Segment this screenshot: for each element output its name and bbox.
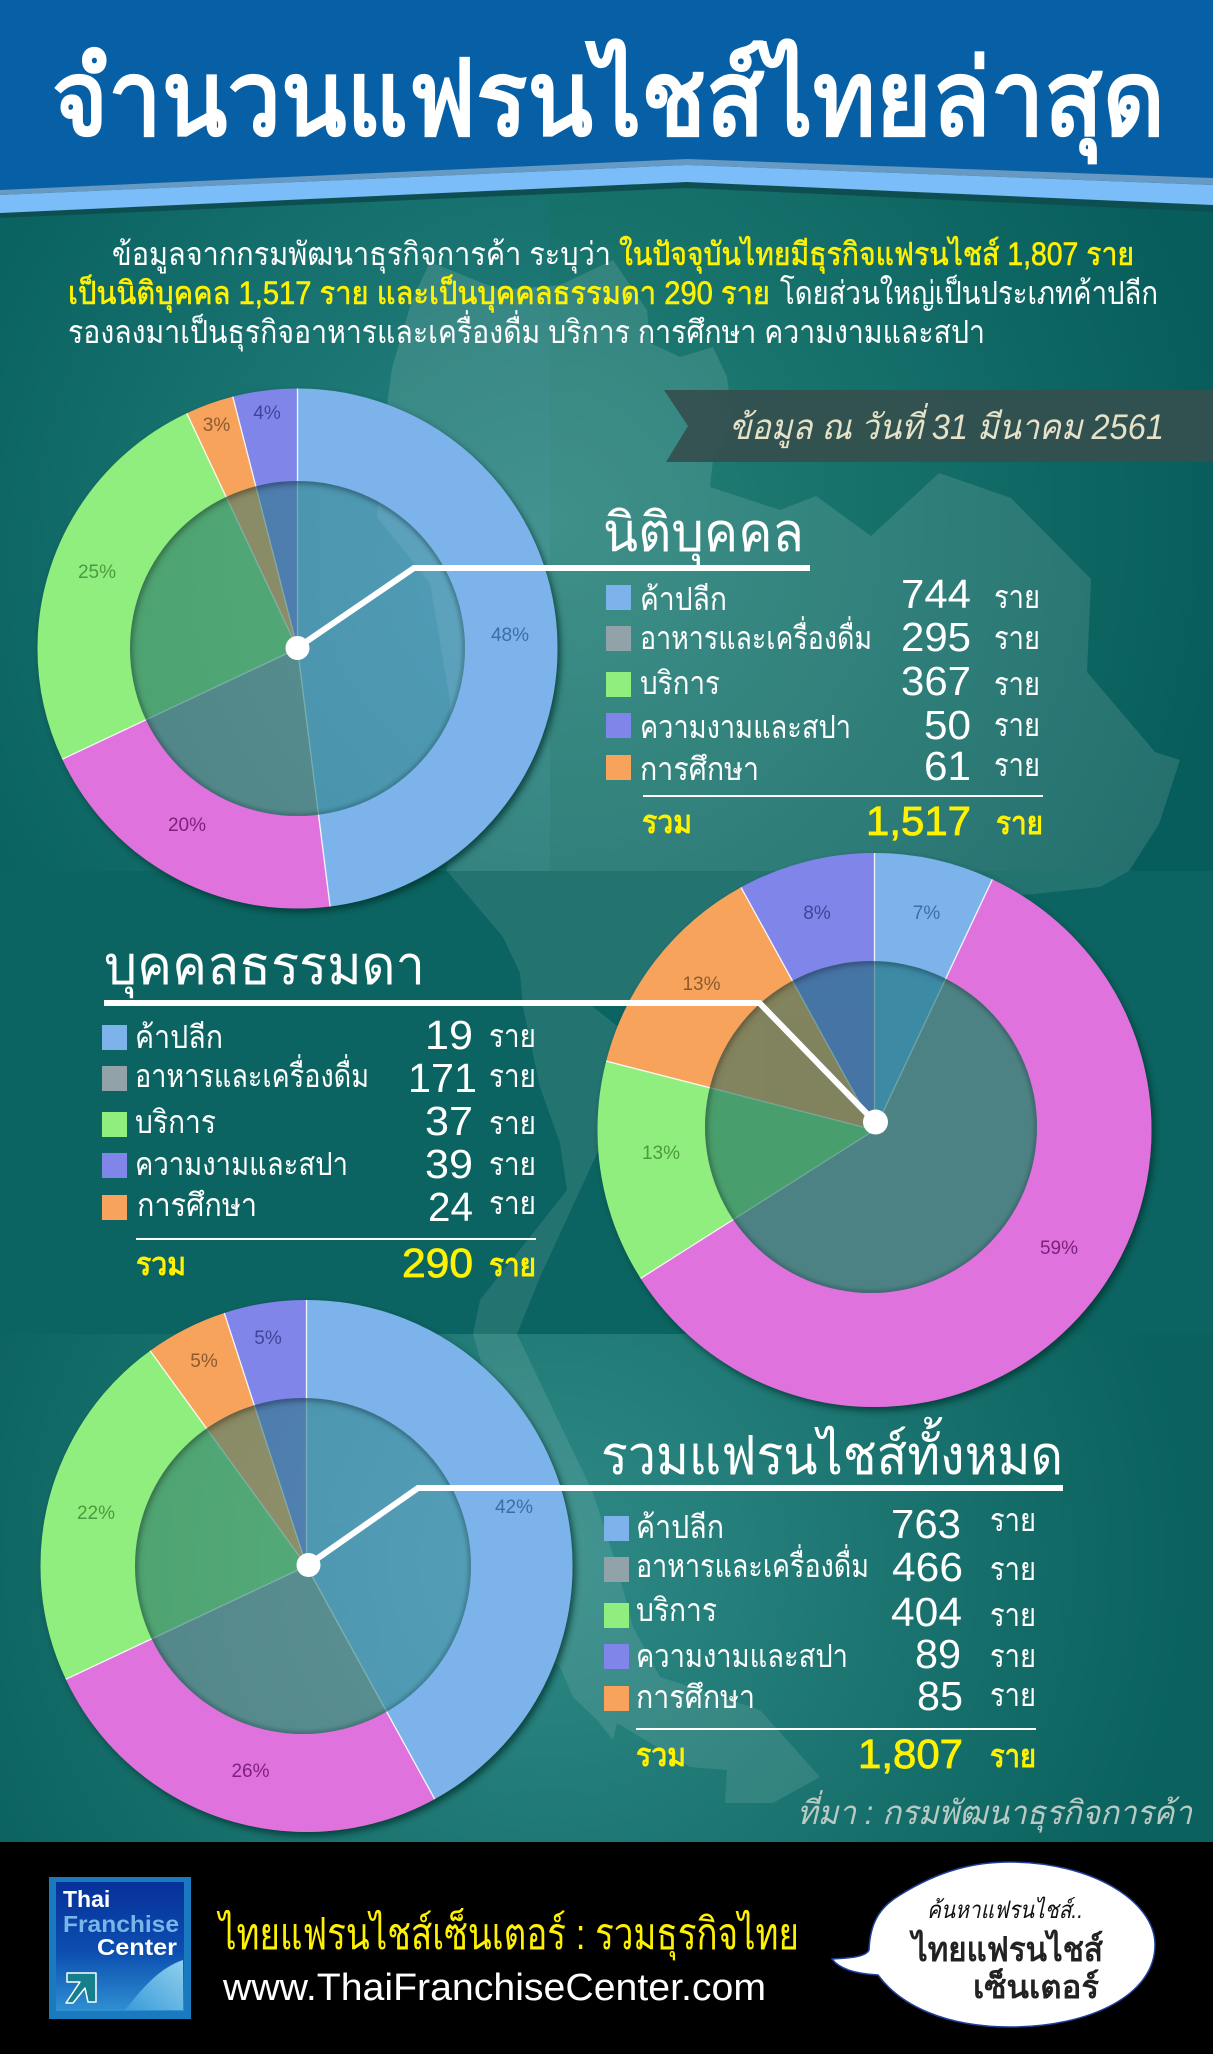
footer tagline: ไทยแฟรนไชส์เซ็นเตอร์ : รวมธุรกิจไทย xyxy=(217,1908,799,1961)
legend table: บุคคลธรรมดา: 19 xyxy=(425,1012,473,1058)
legend table: นิติบุคคล: 367 xyxy=(901,658,971,704)
legend table: รวมแฟรนไชส์ทั้งหมด: 89 xyxy=(915,1631,961,1677)
logo: Thai Franchise Center: Center xyxy=(97,1934,177,1960)
logo: Thai Franchise Center: Franchise xyxy=(63,1911,179,1937)
percentage labels xyxy=(78,403,529,836)
legend table: นิติบุคคล: 295 xyxy=(901,614,971,660)
legend table: บุคคลธรรมดา: บริการ xyxy=(135,1104,216,1140)
heading: บุคคลธรรมดา: บุคคลธรรมดา xyxy=(104,936,425,999)
legend table: รวมแฟรนไชส์ทั้งหมด: 85 xyxy=(917,1673,963,1719)
legend table: นิติบุคคล: 744 xyxy=(901,571,971,617)
legend table: นิติบุคคล: อาหารและเครื่องดื่ม xyxy=(640,616,872,656)
legend table: นิติบุคคล: บริการ xyxy=(640,665,720,701)
speech bubble xyxy=(832,1862,1155,2027)
legend table: บุคคลธรรมดา xyxy=(102,1012,536,1286)
legend table: รวมแฟรนไชส์ทั้งหมด: ราย xyxy=(990,1738,1036,1774)
legend table: รวมแฟรนไชส์ทั้งหมด: 404 xyxy=(891,1589,962,1635)
legend table: นิติบุคคล: รวม xyxy=(642,804,692,840)
footer website: www.ThaiFranchiseCenter.com xyxy=(222,1967,766,2009)
legend table: รวมแฟรนไชส์ทั้งหมด: ค้าปลีก xyxy=(636,1509,724,1545)
legend table: นิติบุคคล: ราย xyxy=(994,666,1040,702)
speech bubble: ไทยแฟรนไชส์ xyxy=(909,1929,1103,1969)
leader line with pin xyxy=(104,1003,888,1134)
legend table: บุคคลธรรมดา: ราย xyxy=(489,1247,536,1283)
percentage labels: 3% xyxy=(203,415,230,436)
legend table: นิติบุคคล: ความงามและสปา xyxy=(640,709,851,745)
donut chart: นิติบุคคล xyxy=(62,388,529,906)
legend table: บุคคลธรรมดา: ความงามและสปา xyxy=(135,1146,348,1182)
legend table: นิติบุคคล: 1,517 xyxy=(866,798,971,844)
source note: ที่มา : กรมพัฒนาธุรกิจการค้า xyxy=(797,1790,1193,1833)
legend table: รวมแฟรนไชส์ทั้งหมด: ความงามและสปา xyxy=(636,1638,848,1674)
intro text block: ในปัจจุบันไทยมีธุรกิจแฟรนไชส์ 1,807 ราย xyxy=(619,236,1134,274)
legend table: บุคคลธรรมดา: ราย xyxy=(489,1105,536,1141)
footer panel xyxy=(0,1842,1213,2054)
percentage labels: 8% xyxy=(803,903,831,924)
percentage labels xyxy=(77,1328,533,1782)
percentage labels: 48% xyxy=(491,625,529,646)
percentage labels: 5% xyxy=(190,1351,218,1372)
legend table: รวมแฟรนไชส์ทั้งหมด: ราย xyxy=(990,1677,1036,1713)
percentage labels xyxy=(642,903,1078,1259)
percentage labels: 4% xyxy=(253,403,281,424)
legend table: บุคคลธรรมดา: ราย xyxy=(489,1146,536,1182)
legend table: นิติบุคคล: 61 xyxy=(924,743,971,789)
legend table: รวมแฟรนไชส์ทั้งหมด: บริการ xyxy=(636,1592,717,1628)
legend table: บุคคลธรรมดา: 39 xyxy=(425,1141,473,1187)
percentage labels: 5% xyxy=(254,1328,282,1349)
legend table: รวมแฟรนไชส์ทั้งหมด: รวม xyxy=(636,1737,686,1773)
legend table: รวมแฟรนไชส์ทั้งหมด: 1,807 xyxy=(858,1731,963,1777)
intro text block xyxy=(68,236,1158,352)
percentage labels: 13% xyxy=(682,974,721,995)
legend table: นิติบุคคล: ราย xyxy=(994,707,1040,743)
intro text block: โดยส่วนใหญ่เป็นประเภทค้าปลีก xyxy=(780,274,1158,311)
date ribbon xyxy=(664,390,1213,462)
percentage labels: 59% xyxy=(1040,1238,1078,1259)
heading: รวมแฟรนไชส์ทั้งหมด: รวมแฟรนไชส์ทั้งหมด xyxy=(601,1417,1063,1486)
legend table: บุคคลธรรมดา: 171 xyxy=(408,1055,477,1101)
legend table: รวมแฟรนไชส์ทั้งหมด: อาหารและเครื่องดื่ม xyxy=(636,1544,869,1584)
legend table: บุคคลธรรมดา: ราย xyxy=(489,1018,536,1054)
percentage labels: 42% xyxy=(495,1497,533,1518)
legend table: รวมแฟรนไชส์ทั้งหมด: การศึกษา xyxy=(636,1679,755,1715)
background: Thailand map silhouette xyxy=(377,260,1180,1803)
legend table: นิติบุคคล: ราย xyxy=(994,579,1040,615)
percentage labels: 25% xyxy=(78,562,116,583)
logo: Thai Franchise Center: Thai xyxy=(63,1886,110,1912)
legend table: รวมแฟรนไชส์ทั้งหมด: ราย xyxy=(990,1638,1036,1674)
header banner xyxy=(0,0,1213,218)
logo: Thai Franchise Center xyxy=(49,1877,191,2019)
leader line with pin xyxy=(296,1488,1063,1577)
legend table: รวมแฟรนไชส์ทั้งหมด: 763 xyxy=(891,1501,961,1547)
legend table: รวมแฟรนไชส์ทั้งหมด: ราย xyxy=(990,1502,1036,1538)
speech bubble: เซ็นเตอร์ xyxy=(973,1967,1099,2005)
date ribbon: ข้อมูล ณ วันที่ 31 มีนาคม 2561 xyxy=(729,403,1164,449)
legend table: บุคคลธรรมดา: ค้าปลีก xyxy=(135,1019,223,1055)
legend table: นิติบุคคล: 50 xyxy=(924,702,971,748)
legend table: รวมแฟรนไชส์ทั้งหมด: 466 xyxy=(892,1544,963,1590)
percentage labels: 20% xyxy=(168,815,206,836)
legend table: นิติบุคคล: ราย xyxy=(994,620,1040,656)
legend table: บุคคลธรรมดา: 24 xyxy=(428,1184,473,1230)
legend table: รวมแฟรนไชส์ทั้งหมด: ราย xyxy=(990,1551,1036,1587)
legend table: นิติบุคคล: ราย xyxy=(996,805,1043,841)
donut chart: รวมแฟรนไชส์ทั้งหมด xyxy=(66,1300,533,1799)
legend table: บุคคลธรรมดา: อาหารและเครื่องดื่ม xyxy=(135,1054,369,1094)
percentage labels: 13% xyxy=(642,1143,680,1164)
percentage labels: 22% xyxy=(77,1503,115,1524)
legend table: บุคคลธรรมดา: การศึกษา xyxy=(137,1187,257,1223)
intro text block: รองลงมาเป็นธุรกิจอาหารและเครื่องดื่ม บริการ การศึกษา ความงามและสปา xyxy=(68,310,985,352)
legend table: บุคคลธรรมดา: 37 xyxy=(425,1098,473,1144)
legend table: นิติบุคคล xyxy=(606,571,1043,844)
heading: นิติบุคคล: นิติบุคคล xyxy=(603,503,804,566)
legend table: บุคคลธรรมดา: รวม xyxy=(136,1246,186,1282)
intro text block: เป็นนิติบุคคล 1,517 ราย และเป็นบุคคลธรรมดา 290 ราย xyxy=(68,274,770,313)
leader line with pin xyxy=(286,568,810,660)
legend table: รวมแฟรนไชส์ทั้งหมด xyxy=(604,1501,1036,1777)
legend table: รวมแฟรนไชส์ทั้งหมด: ราย xyxy=(990,1597,1036,1633)
legend table: นิติบุคคล: ราย xyxy=(994,747,1040,783)
legend table: นิติบุคคล: การศึกษา xyxy=(640,751,759,787)
legend table: บุคคลธรรมดา: 290 xyxy=(402,1240,473,1286)
donut chart: บุคคลธรรมดา xyxy=(606,853,1078,1293)
percentage labels: 26% xyxy=(231,1761,270,1782)
legend table: บุคคลธรรมดา: ราย xyxy=(489,1185,536,1221)
percentage labels: 7% xyxy=(913,903,940,924)
legend table: บุคคลธรรมดา: ราย xyxy=(489,1058,536,1094)
speech bubble: ค้นหาแฟรนไชส์.. xyxy=(927,1896,1083,1924)
legend table: นิติบุคคล: ค้าปลีก xyxy=(640,581,727,617)
intro text block: ข้อมูลจากกรมพัฒนาธุรกิจการค้า ระบุว่า xyxy=(112,236,611,274)
